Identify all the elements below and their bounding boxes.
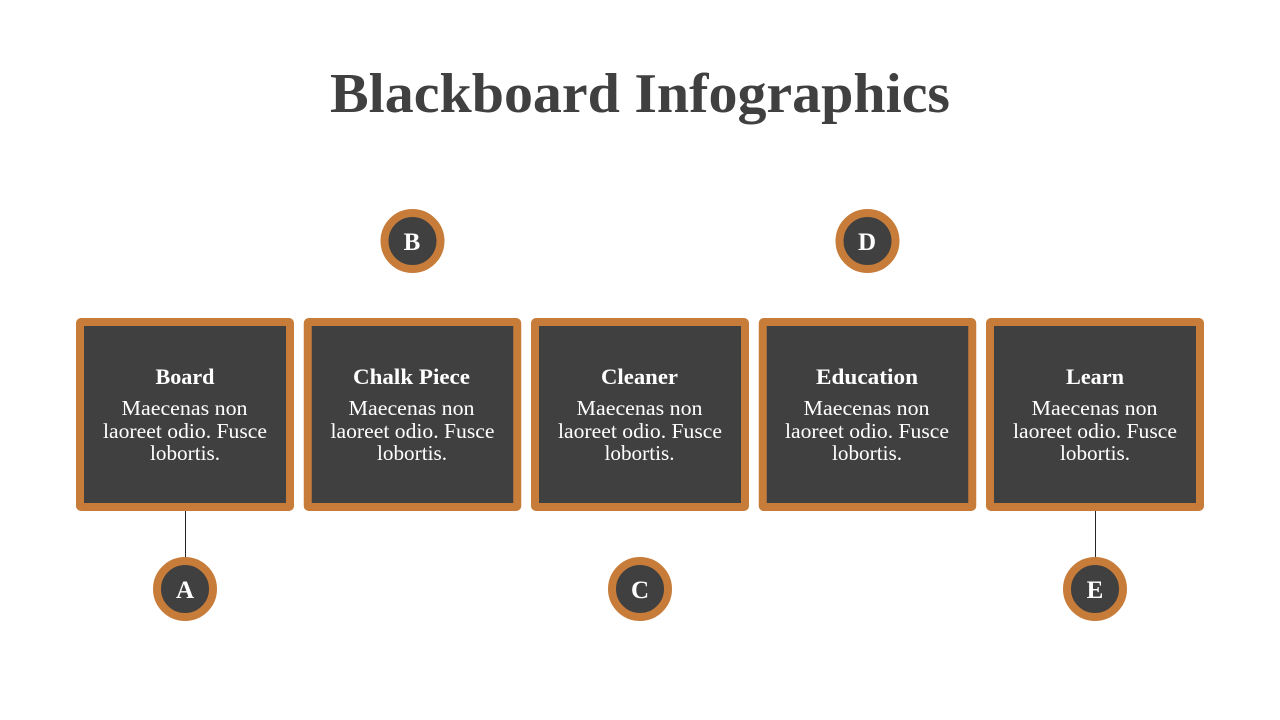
text block: Education description: lobortis. (832, 441, 902, 465)
connector line: Board to A (184, 511, 186, 558)
text block: Education description: Maecenas non (804, 396, 930, 420)
text block: Board description: lobortis. (150, 441, 220, 465)
panel: Learn (990, 322, 1200, 507)
badge: D: D (858, 229, 876, 256)
badge: A: A (176, 577, 194, 604)
text block: Cleaner description (558, 396, 722, 465)
text block: Cleaner description: lobortis. (604, 441, 674, 465)
badge: E: E (1087, 577, 1103, 604)
title: Blackboard Infographics (330, 63, 950, 125)
heading: Learn: Learn (1066, 364, 1124, 389)
text block: Board description: Maecenas non (122, 396, 248, 420)
text block: Learn description (1013, 396, 1177, 465)
text block: Education description (785, 396, 949, 465)
connector line: Learn to E (1094, 511, 1096, 558)
text block: Board description (103, 396, 267, 465)
heading: Chalk Piece: Chalk Piece (353, 364, 470, 389)
text block: Chalk Piece description: Maecenas non (348, 396, 475, 420)
text block: Board description: laoreet odio. Fusce (103, 419, 267, 443)
badge: A (157, 561, 213, 617)
text block: Cleaner description: Maecenas non (576, 396, 703, 420)
text block: Learn description: laoreet odio. Fusce (1013, 419, 1177, 443)
text block: Learn description: Maecenas non (1032, 396, 1158, 420)
text block: Chalk Piece description: laoreet odio. Fusce (330, 419, 494, 443)
panel: Cleaner (535, 322, 745, 507)
badge: D (840, 213, 896, 269)
text block: Chalk Piece description (330, 396, 494, 465)
badge: C (612, 561, 668, 617)
text block: Learn description: lobortis. (1060, 441, 1130, 465)
heading: Cleaner: Cleaner (601, 364, 678, 389)
text block: Chalk Piece description: lobortis. (377, 441, 447, 465)
text block: Education description: laoreet odio. Fusce (785, 419, 949, 443)
panel: Education (763, 322, 972, 507)
panel: Chalk Piece (308, 322, 517, 507)
text block: Cleaner description: laoreet odio. Fusce (558, 419, 722, 443)
heading: Education: Education (816, 364, 918, 389)
badge: B (384, 213, 440, 269)
badge: B: B (404, 229, 420, 256)
panel: Board (80, 322, 290, 507)
badge: C: C (631, 577, 649, 604)
heading: Board: Board (156, 364, 214, 389)
badge: E (1067, 561, 1123, 617)
